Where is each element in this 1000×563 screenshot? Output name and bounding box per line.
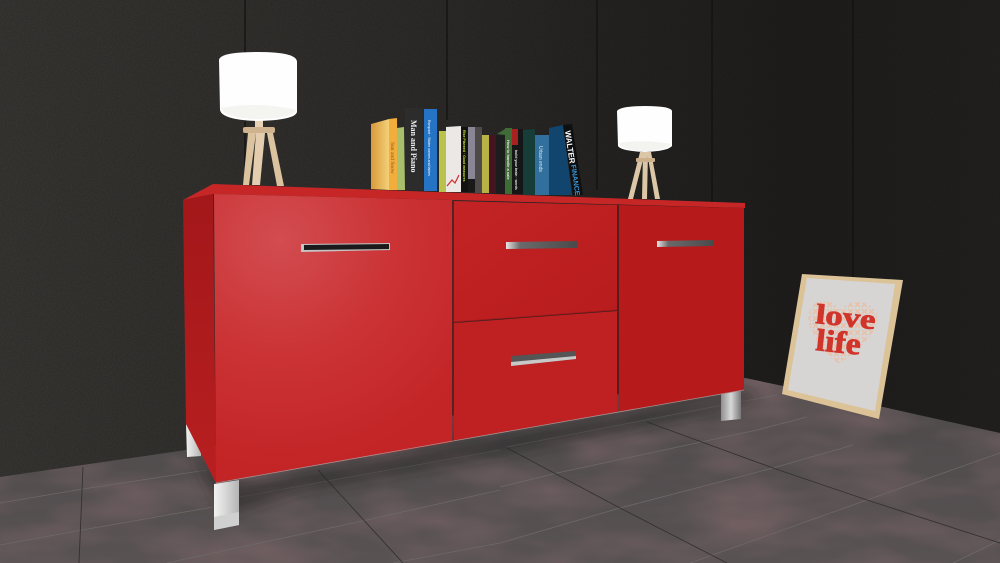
small lamp xyxy=(617,106,672,199)
right door handle xyxy=(657,240,714,247)
book titles: build your brain · words xyxy=(514,150,518,190)
row of books xyxy=(371,108,583,196)
book titles: Man and Piano xyxy=(409,120,418,172)
book titles: Urban ends xyxy=(537,146,543,172)
heart motif xyxy=(808,302,878,364)
poster text: love xyxy=(814,299,877,336)
cabinet top xyxy=(183,184,745,208)
left door handle xyxy=(301,243,390,252)
lamp stand xyxy=(243,108,284,186)
book titles: How to handle a sale xyxy=(506,140,511,180)
wood frame xyxy=(782,274,903,419)
book titles: WALTER xyxy=(563,130,577,164)
light grout lines xyxy=(0,395,1000,563)
framed poster xyxy=(782,274,903,419)
dark tile joints xyxy=(79,422,1000,563)
poster text xyxy=(814,299,877,362)
upper drawer xyxy=(454,201,617,322)
lower drawer handle xyxy=(511,351,576,366)
lower drawer xyxy=(454,311,617,441)
cabinet shadow xyxy=(190,392,760,515)
legs xyxy=(186,390,741,530)
right door xyxy=(619,205,744,412)
book titles: Rise Planned · Good measures xyxy=(462,130,466,182)
poster text: life xyxy=(814,322,863,362)
poster paper xyxy=(788,278,895,411)
upper drawer handle xyxy=(506,241,577,249)
cabinet side xyxy=(183,194,216,483)
book titles: FINANCE xyxy=(569,164,580,196)
chrome bottom edge xyxy=(216,390,744,483)
book titles: Sun and Snow xyxy=(389,142,395,174)
sideboard xyxy=(183,184,745,530)
lamp shade xyxy=(219,52,297,121)
large lamp xyxy=(219,52,297,186)
book titles: Rampant · Stolen names and fables xyxy=(427,120,431,176)
book titles xyxy=(389,120,580,196)
left door xyxy=(214,194,452,483)
tiled floor xyxy=(0,370,1000,563)
